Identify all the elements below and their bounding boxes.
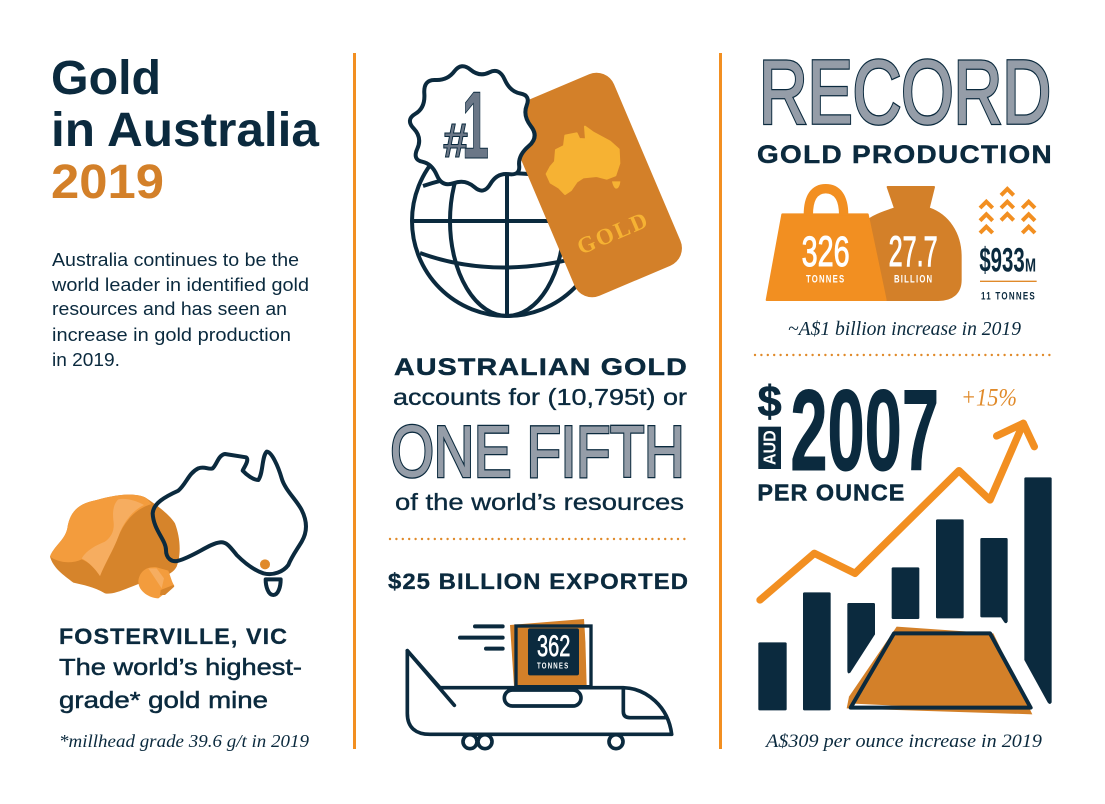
headline: record gold production: GOLD PRODUCTION: [757, 141, 1053, 169]
icon: upward chevrons: [980, 189, 1035, 233]
icon: weight: [767, 189, 886, 300]
icon: plane body: [407, 651, 672, 734]
icon: globe: [412, 126, 602, 316]
icon: gold cargo: [510, 619, 591, 687]
icon: money bag: [868, 187, 961, 300]
intro text block: [51, 249, 309, 370]
price figure: AUD: [760, 430, 780, 465]
dotted separator right: [755, 354, 1053, 356]
trend arrow: [760, 423, 1034, 600]
value: 933 million: M: [1025, 255, 1036, 276]
caption: A$309 per ounce: A$309 per ounce increase in 2019: [764, 731, 1043, 752]
icon: money bag: 27.7: [889, 228, 938, 276]
icon: Fosterville location dot: [260, 559, 270, 569]
intro text block: resources and has seen an: [52, 298, 287, 319]
icon: plane wheels: [463, 735, 623, 749]
illustration: globe, gold bar and badge: [410, 66, 688, 316]
icon: number one badge: 1: [462, 72, 489, 179]
headline: Australian gold share: ONE FIFTH: [390, 412, 684, 492]
icon: gold cargo: TONNES: [537, 660, 569, 670]
intro text block: in 2019.: [52, 349, 120, 370]
headline: Australian gold share: accounts for (10,795t) or: [393, 384, 687, 410]
bar chart: [758, 477, 1052, 710]
value: 933 million: $933: [979, 242, 1025, 280]
title: in Australia: [51, 104, 319, 157]
price figure: PER OUNCE: [757, 480, 905, 506]
icon: gold nugget: [50, 495, 180, 598]
price figure: 2007: [790, 367, 939, 495]
icon: gold bar: [501, 67, 688, 303]
icon: weight: 326: [802, 228, 850, 276]
icon: speed lines: [460, 626, 503, 649]
icon: money bag: BILLION: [894, 274, 933, 286]
icon: gold cargo: 362: [537, 630, 570, 663]
intro text block: Australia continues to be the: [52, 249, 299, 270]
headline: Australian gold share: ONE FIFTH: [390, 412, 684, 492]
icon: Australia map outline: [153, 452, 306, 595]
headline: Australian gold share: of the world’s resources: [395, 489, 684, 515]
icon: gold bar: GOLD: [573, 207, 651, 259]
divider right: [719, 53, 722, 749]
Fosterville text: FOSTERVILLE, VIC: [59, 624, 288, 649]
title: [51, 52, 319, 209]
title: Gold: [51, 52, 161, 105]
Fosterville text: [59, 624, 302, 713]
icon: number one badge: #: [443, 115, 468, 168]
value: 933 million: [979, 242, 1037, 302]
dotted separator centre: [390, 538, 688, 540]
production icons: [767, 187, 1037, 302]
intro text block: increase in gold production: [52, 324, 291, 345]
illustration: cargo plane: [407, 619, 672, 749]
Fosterville text: grade* gold mine: [59, 687, 268, 713]
icon: gold ingot: [847, 627, 1032, 714]
icon: number one badge: [410, 66, 535, 191]
growth label: +15%: [961, 384, 1017, 412]
illustration: gold nugget and Australia map: [50, 452, 306, 598]
price figure: $: [758, 378, 782, 426]
caption: A$1 billion increase: ~A$1 billion increase in 2019: [788, 319, 1021, 340]
title: 2019: [51, 156, 164, 209]
Fosterville text: The world’s highest-: [59, 654, 302, 680]
value: 933 million: 11 TONNES: [981, 290, 1036, 302]
intro text block: world leader in identified gold: [51, 274, 309, 295]
headline: record gold production: [757, 43, 1053, 169]
divider left: [353, 53, 356, 749]
headline: Australian gold share: AUSTRALIAN GOLD: [394, 354, 688, 381]
headline: Australian gold share: [390, 354, 688, 515]
footnote: millhead grade: *millhead grade 39.6 g/t in 2019: [59, 731, 309, 751]
price figure: [757, 367, 939, 506]
export value text: $25 BILLION EXPORTED: [388, 569, 689, 594]
price chart panel: [757, 367, 1052, 714]
icon: weight: TONNES: [806, 274, 845, 286]
